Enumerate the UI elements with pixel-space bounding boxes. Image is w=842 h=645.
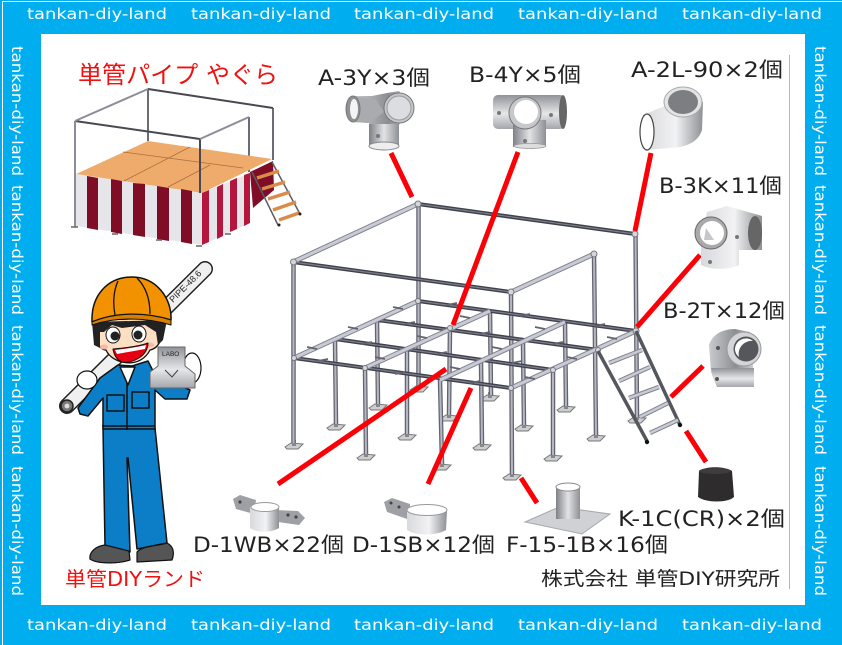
scaffold legs — [294, 204, 637, 474]
mascot shoes — [90, 543, 173, 563]
part: F-15-1B — [525, 483, 610, 534]
top border watermark text: tankan-diy-land — [354, 5, 494, 23]
part: A-3Y — [346, 91, 414, 150]
left border watermark text — [8, 46, 26, 596]
label: D-1WB: D-1WB×22個 — [193, 533, 344, 557]
mascot: worker character — [61, 268, 205, 563]
diagram: pipe scaffold — [285, 201, 682, 480]
mascot face — [92, 318, 167, 363]
scaffold feet — [285, 383, 646, 480]
side skirt stripes — [202, 173, 250, 245]
label: K-1C: K-1C(CR)×2個 — [618, 507, 785, 531]
top border watermark text — [27, 5, 822, 23]
mascot caption: 単管DIYランド — [65, 567, 205, 591]
right border watermark text: tankan-diy-land — [811, 466, 829, 596]
mascot pipe — [61, 268, 205, 412]
top border watermark text: tankan-diy-land — [191, 5, 331, 23]
mascot helmet — [92, 277, 171, 325]
bottom border watermark text: tankan-diy-land — [682, 616, 822, 634]
top border watermark text: tankan-diy-land — [682, 5, 822, 23]
part: A-2L-90 — [640, 87, 703, 150]
right border watermark text: tankan-diy-land — [811, 185, 829, 315]
mascot pipe: PIPE-48.6 — [167, 268, 203, 304]
bottom border watermark text: tankan-diy-land — [518, 616, 658, 634]
mascot torso and arms — [78, 361, 190, 430]
part: B-3K — [695, 206, 762, 269]
bottom border watermark text: tankan-diy-land — [354, 616, 494, 634]
scaffold joints — [290, 201, 639, 390]
thin orange rule — [788, 55, 790, 589]
top border watermark text: tankan-diy-land — [27, 5, 167, 23]
part: B-4Y — [493, 95, 567, 148]
part: B-2T — [709, 329, 761, 387]
mascot holding fitting — [150, 347, 195, 388]
label: B-2T: B-2T×12個 — [663, 299, 785, 323]
label: B-3K: B-3K×11個 — [659, 174, 782, 198]
label: B-4Y: B-4Y×5個 — [469, 63, 581, 87]
part: K-1C cap — [698, 467, 734, 502]
label: A-3Y: A-3Y×3個 — [318, 66, 430, 90]
part: D-1SB — [384, 498, 447, 534]
right border watermark text — [811, 46, 829, 596]
bottom border watermark text: tankan-diy-land — [191, 616, 331, 634]
top border watermark text: tankan-diy-land — [518, 5, 658, 23]
mascot gloves — [77, 353, 201, 389]
left border watermark text: tankan-diy-land — [8, 325, 26, 455]
part: D-1WB — [233, 495, 305, 532]
right border watermark text: tankan-diy-land — [811, 325, 829, 455]
label: F-15-1B: F-15-1B×16個 — [506, 533, 668, 557]
label: A-2L-90: A-2L-90×2個 — [631, 58, 783, 82]
front skirt stripes — [76, 174, 202, 245]
red leader lines — [278, 152, 706, 503]
company name: 株式会社 単管DIY研究所 — [541, 568, 780, 590]
illustration: finished stage — [71, 89, 302, 246]
bottom border watermark text: tankan-diy-land — [27, 616, 167, 634]
left border watermark text: tankan-diy-land — [8, 185, 26, 315]
bottom border watermark text — [27, 616, 822, 634]
stage top frame — [75, 89, 273, 193]
scaffold top rails — [293, 204, 635, 292]
scaffold stairs — [598, 331, 682, 444]
deck — [76, 141, 272, 193]
right border watermark text: tankan-diy-land — [811, 46, 829, 176]
stage stairs — [252, 162, 302, 226]
mascot holding fitting: LABO — [162, 351, 179, 358]
stair backing skirt — [250, 161, 274, 208]
mascot legs — [103, 428, 167, 552]
stage back frame — [148, 89, 273, 172]
left border watermark text: tankan-diy-land — [8, 46, 26, 176]
left border watermark text: tankan-diy-land — [8, 466, 26, 596]
label: D-1SB: D-1SB×12個 — [352, 533, 495, 557]
title: 単管パイプ やぐら — [78, 61, 278, 89]
scaffold deck pipes — [294, 301, 636, 388]
